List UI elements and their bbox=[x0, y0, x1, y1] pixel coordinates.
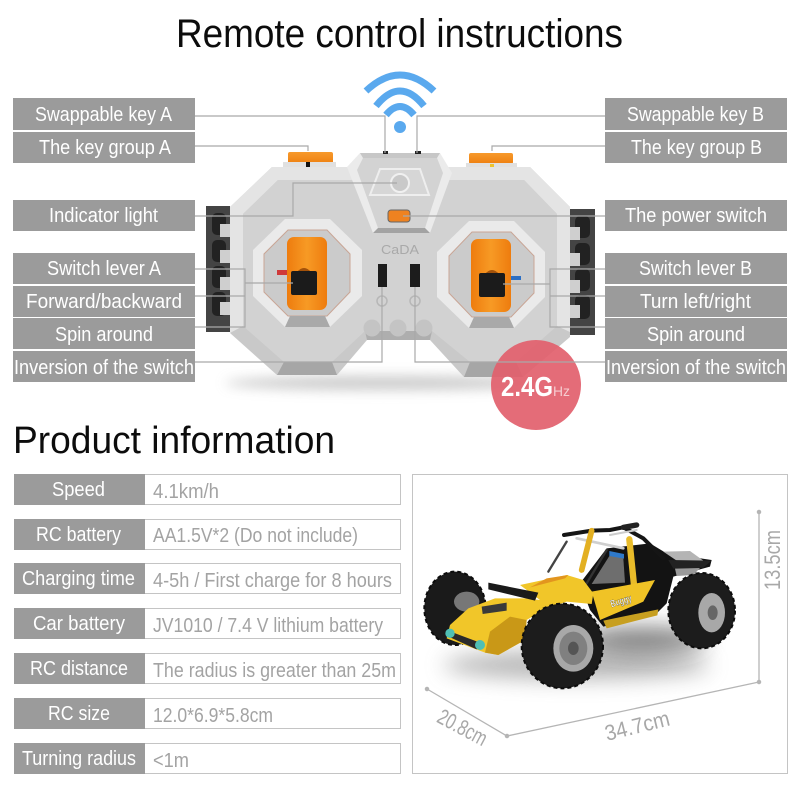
row: rc distance bbox=[14, 653, 400, 684]
callouts: left labels: The key group A bbox=[39, 137, 172, 159]
row: car battery: JV1010 / 7.4 V lithium battery bbox=[153, 615, 383, 637]
dimension: width: 20.8cm bbox=[433, 704, 492, 751]
callouts: right labels: The key group B bbox=[631, 137, 762, 159]
row: rc distance: RC distance bbox=[30, 658, 128, 680]
callouts: right labels: Swappable key B bbox=[627, 104, 764, 126]
callouts: right labels: Switch lever B bbox=[639, 258, 752, 280]
engine bbox=[663, 551, 712, 576]
controller body bbox=[230, 167, 570, 377]
top key A bbox=[283, 152, 336, 172]
illustration: remote controller bbox=[206, 151, 595, 390]
row: rc battery: AA1.5V*2 (Do not include) bbox=[153, 525, 358, 547]
indicator light bbox=[391, 174, 409, 192]
callouts: left labels: Forward/backward bbox=[26, 291, 182, 313]
callouts: left labels: Swappable key A bbox=[35, 104, 173, 126]
seat bbox=[592, 555, 625, 584]
right side gear bbox=[570, 209, 595, 335]
dimension: height: 13.5cm bbox=[760, 530, 785, 590]
badge: 2.4G Hz bbox=[491, 340, 581, 430]
row: rc distance: The radius is greater than 25m bbox=[153, 660, 396, 682]
dimension lines bbox=[425, 510, 761, 738]
side panel bbox=[592, 580, 658, 628]
row: car battery bbox=[14, 608, 400, 639]
badge: 2.4G Hz: Hz bbox=[553, 383, 570, 399]
row: speed: 4.1km/h bbox=[153, 481, 219, 503]
centre panel bbox=[347, 153, 452, 233]
body bbox=[445, 575, 593, 655]
row: rc size: 12.0*6.9*5.8cm bbox=[153, 705, 273, 727]
row: turning radius: Turning radius bbox=[22, 748, 136, 770]
row: rc size bbox=[14, 698, 400, 729]
callouts: right labels: Turn left/right bbox=[640, 291, 751, 313]
heading: product information: Product information bbox=[13, 420, 335, 462]
brand mark: CaDA bbox=[381, 242, 419, 257]
callouts: left labels bbox=[13, 98, 195, 382]
row: rc battery bbox=[14, 519, 400, 550]
callouts: right labels: Spin around bbox=[647, 324, 745, 346]
rear-left wheel bbox=[424, 572, 486, 645]
callouts: right labels: Inversion of the switch bbox=[606, 357, 786, 379]
switches and buttons bbox=[364, 151, 432, 336]
top key B bbox=[466, 153, 517, 173]
callouts: left labels: Switch lever A bbox=[47, 258, 162, 280]
callouts: right labels: The power switch bbox=[625, 205, 767, 227]
row: turning radius: <1m bbox=[153, 750, 189, 772]
badge: 2.4G Hz: 2.4G bbox=[501, 371, 553, 402]
icon: wifi signal bbox=[366, 75, 434, 133]
row: turning radius bbox=[14, 743, 400, 774]
callouts: right labels bbox=[605, 98, 787, 382]
title: remote control instructions: Remote control instructions bbox=[176, 12, 623, 56]
roll cage bbox=[548, 525, 663, 585]
row: charging time: 4-5h / First charge for 8 hours bbox=[153, 570, 392, 592]
front wheel bbox=[522, 604, 603, 688]
chassis bbox=[580, 543, 712, 627]
row: rc battery: RC battery bbox=[36, 524, 121, 546]
left stick bbox=[253, 219, 362, 327]
row: speed bbox=[14, 474, 400, 505]
right stick bbox=[437, 221, 545, 328]
side panel: Buggy bbox=[609, 593, 634, 610]
panel: car dimensions bbox=[412, 474, 788, 774]
car illustration bbox=[424, 525, 735, 688]
table: product specs bbox=[14, 474, 400, 774]
callouts: left labels: Inversion of the switch bbox=[14, 357, 194, 379]
row: charging time bbox=[14, 563, 400, 594]
power button bbox=[388, 210, 410, 222]
left side gear bbox=[206, 206, 230, 332]
rear-right wheel bbox=[668, 573, 735, 648]
callouts: left labels: Spin around bbox=[55, 324, 153, 346]
dimension: length: 34.7cm bbox=[602, 706, 672, 746]
row: charging time: Charging time bbox=[22, 568, 135, 590]
row: car battery: Car battery bbox=[33, 613, 125, 635]
callouts: left labels: Indicator light bbox=[49, 205, 158, 227]
row: rc size: RC size bbox=[48, 703, 110, 725]
row: speed: Speed bbox=[52, 479, 105, 501]
